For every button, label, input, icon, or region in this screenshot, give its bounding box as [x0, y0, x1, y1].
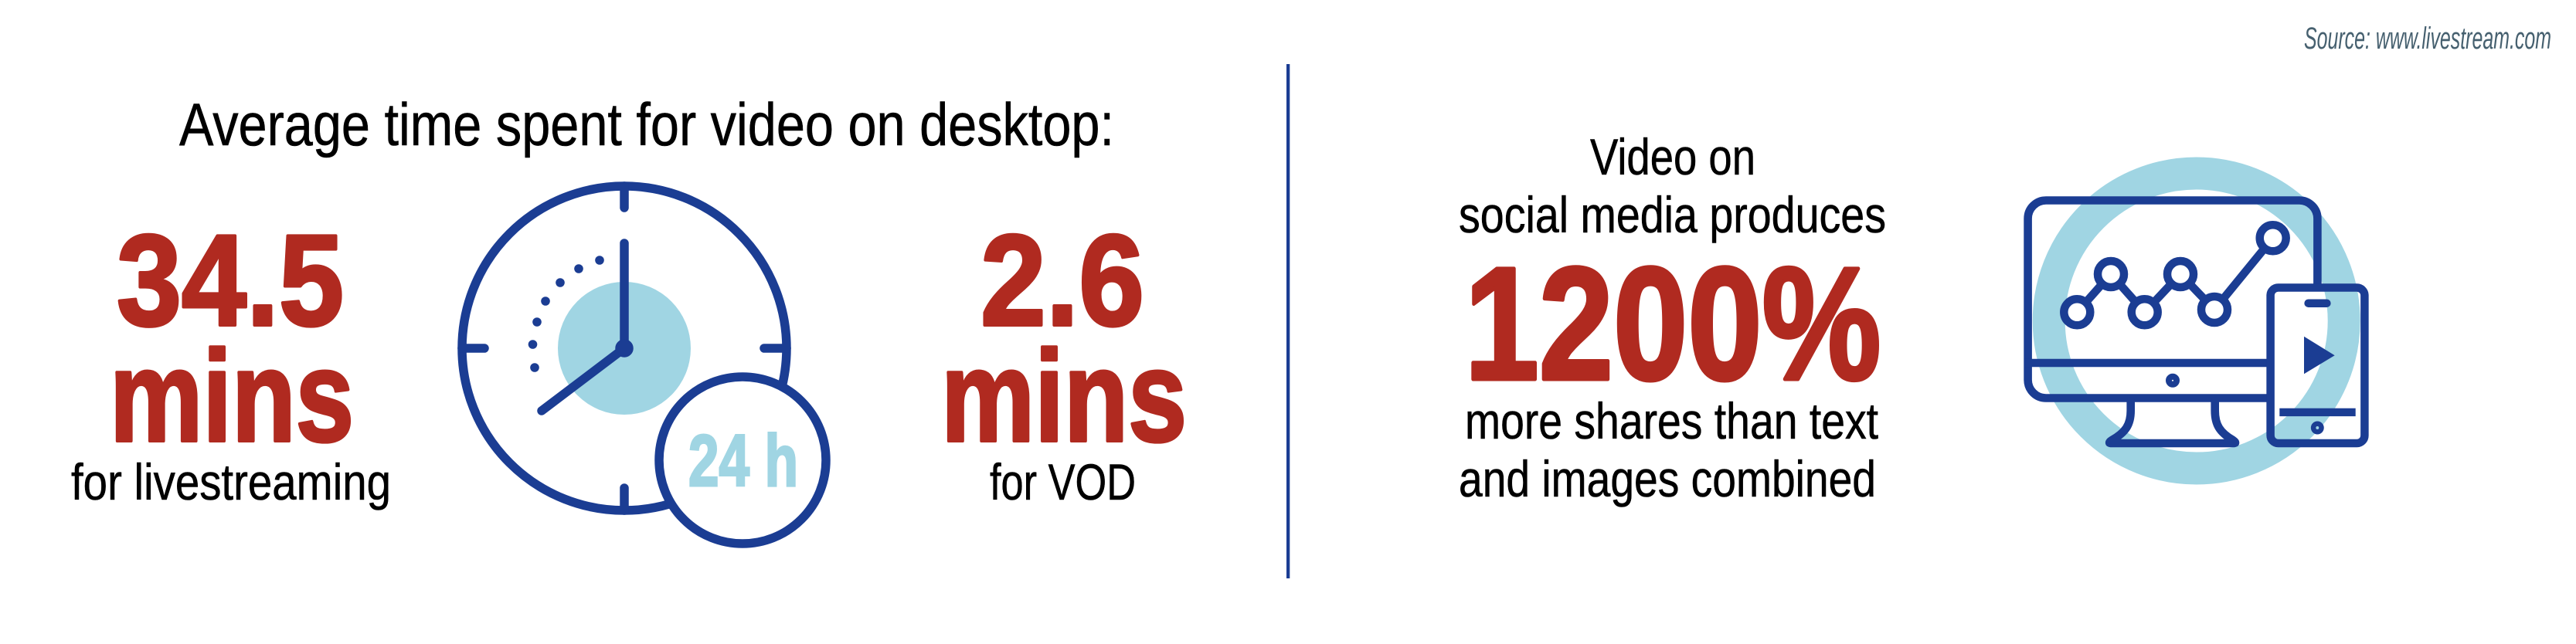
closing text: [1459, 392, 1878, 507]
icon: monitor and tablet with growth chart: [2024, 173, 2364, 468]
elapsed time dots: [528, 256, 604, 372]
stat: livestreaming: [71, 208, 391, 510]
label: for livestreaming: [71, 453, 391, 510]
unit mins: mins: [110, 324, 354, 469]
clock face: [462, 186, 787, 510]
monitor: [2024, 201, 2317, 443]
closing text: more shares than text: [1465, 392, 1878, 449]
unit mins: mins: [941, 324, 1187, 469]
panel: average time spent on desktop: [71, 90, 1187, 544]
icon: clock with 24 h badge: [462, 186, 826, 544]
tablet: [2271, 287, 2364, 443]
label: for VOD: [990, 453, 1136, 510]
intro text: social media produces: [1459, 186, 1886, 243]
24 h badge: [659, 377, 826, 544]
light centre disc: [558, 282, 691, 415]
stat: VOD: [941, 208, 1187, 510]
number 34.5: 34.5: [117, 208, 344, 353]
tick marks: [462, 186, 787, 510]
intro text: Video on: [1590, 128, 1755, 185]
panel: social media shares: [1459, 128, 2364, 507]
24 h badge: 24 h: [688, 420, 798, 502]
growth line chart: [2064, 225, 2286, 325]
intro text: [1459, 128, 1886, 243]
heading: Average time spent for video on desktop:: [179, 90, 1114, 158]
background ring: [2049, 173, 2344, 468]
number 2.6: 2.6: [980, 208, 1144, 353]
play button: [2304, 337, 2335, 374]
closing text: and images combined: [1459, 450, 1876, 507]
clock hands: [542, 243, 629, 411]
number 1200%: 1200%: [1465, 235, 1881, 414]
